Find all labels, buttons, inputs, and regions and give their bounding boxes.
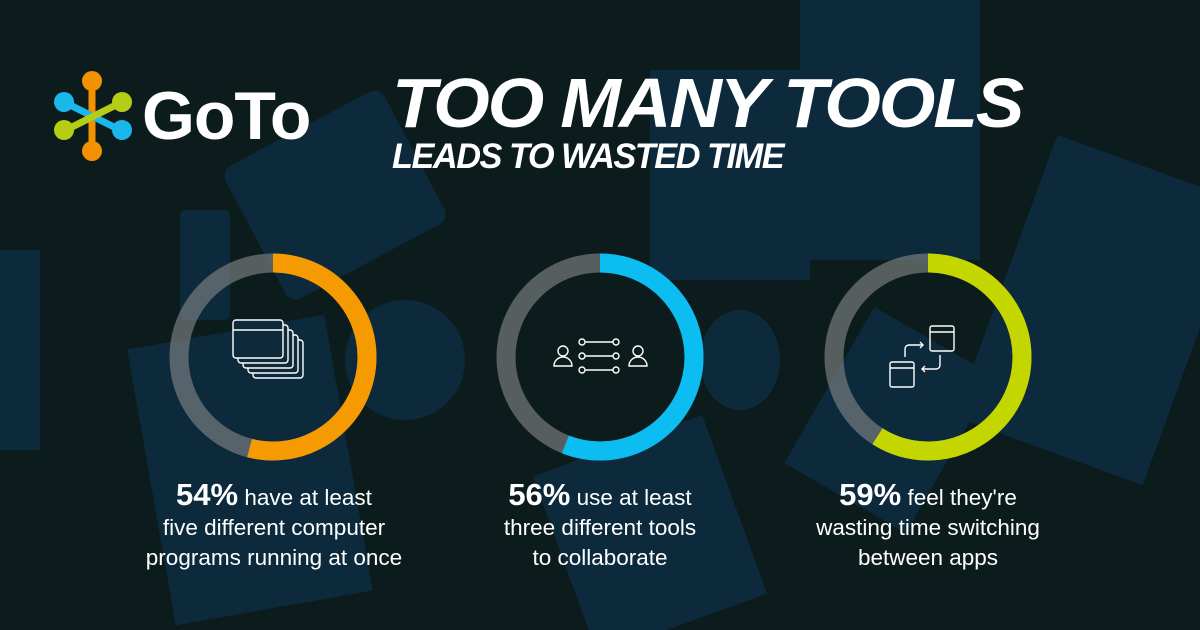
logo text: GoTo (142, 78, 310, 154)
title: LEADS TO WASTED TIME (392, 137, 783, 176)
stat text 3: 59% feel they're (839, 477, 1017, 512)
stat text 2: three different tools (504, 515, 696, 540)
stat text 2: 56% use at least (508, 477, 692, 512)
chart: 56% (496, 254, 704, 460)
stat text 1: 54% have at least (176, 477, 372, 512)
icon: stacked windows (233, 320, 303, 378)
stat text 2: to collaborate (532, 545, 668, 570)
icon: switching apps (890, 326, 954, 387)
stat text 2 (504, 477, 696, 570)
chart: 54% (170, 254, 1006, 460)
title (392, 64, 1024, 176)
icon: goto mark (54, 71, 132, 161)
logo (54, 71, 310, 161)
stat text 1 (146, 477, 402, 570)
stat text 3: wasting time switching (816, 515, 1040, 540)
icon: collaborate (554, 339, 647, 373)
stat text 3: between apps (858, 545, 998, 570)
stat text 3 (816, 477, 1040, 570)
stat text 1: programs running at once (146, 545, 402, 570)
stat text 1: five different computer (163, 515, 385, 540)
chart: 59% (824, 254, 1032, 460)
title: TOO MANY TOOLS (392, 64, 1022, 142)
